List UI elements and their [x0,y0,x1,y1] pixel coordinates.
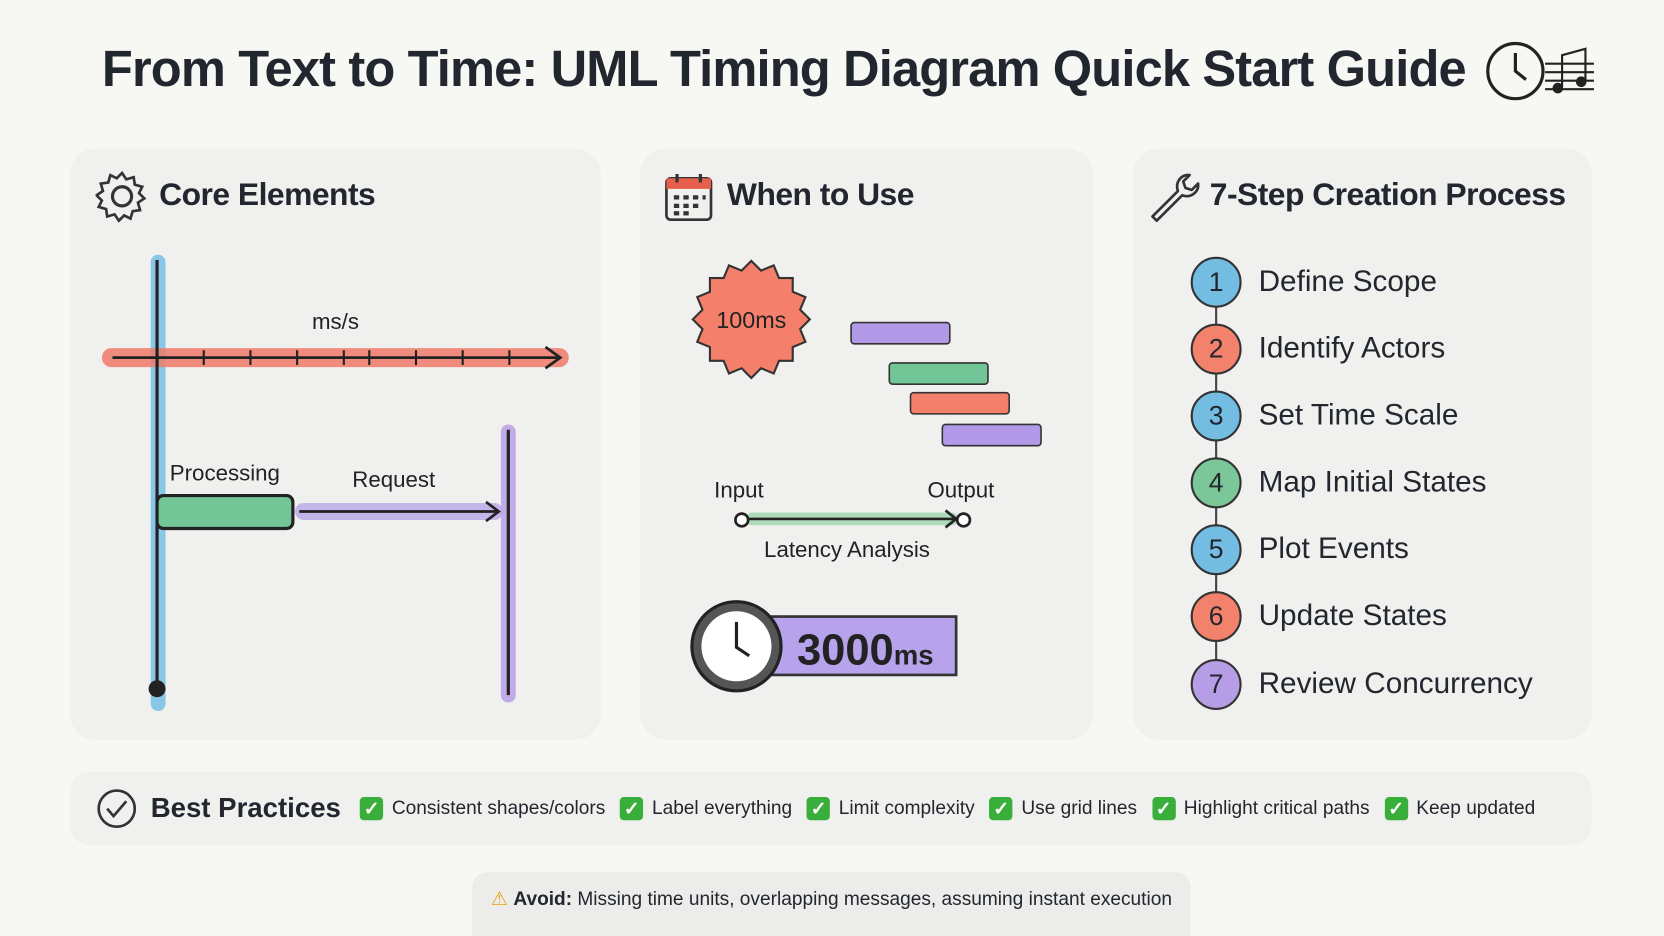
practices list: ✓ [1388,797,1404,819]
step 6: 6 [1209,602,1224,631]
icon: check circle [97,789,136,828]
panel: 7-step process [1133,149,1592,740]
diagram: timing axes: Processing [170,461,280,486]
timeline connector [1215,281,1217,684]
title: From Text to Time: UML Timing Diagram Quick Start Guide [102,41,1466,98]
icon: clock and music [1486,42,1594,100]
heading: core elements: Core Elements [159,177,375,212]
practices list: Highlight critical paths [1184,797,1370,818]
practices list: Use grid lines [1021,797,1137,818]
step 2: 2 [1209,334,1224,364]
step 1: Define Scope [1259,264,1437,297]
practices list: ✓ [364,797,380,819]
step 3: 3 [1209,401,1224,431]
panel: best practices [70,771,1592,845]
diagram: timing axes [102,254,569,711]
practices list: Consistent shapes/colors [392,797,605,818]
step 7 [1190,659,1533,710]
diagram: timing axes: Request [352,467,436,492]
step 6 [1190,591,1447,642]
icon: gear [96,170,146,223]
practices list: ✓ [624,797,640,819]
heading: best practices: Best Practices [151,792,341,823]
step 5: Plot Events [1259,532,1409,565]
practices list: Limit complexity [839,797,975,818]
diagram: timing axes: ms/s [312,309,359,334]
step 6: Update States [1259,599,1447,631]
callout: avoid [472,872,1191,936]
practices list [360,797,1535,820]
practices list: Keep updated [1416,797,1535,818]
step 1 [1190,256,1437,308]
step 2: Identify Actors [1259,331,1445,364]
practices list: ✓ [993,797,1009,819]
step 3: Set Time Scale [1259,398,1458,431]
practices list: ✓ [811,797,827,819]
step 4: Map Initial States [1259,465,1487,498]
step 5: 5 [1209,535,1224,565]
panel: when to use [640,149,1093,740]
step 3 [1190,390,1458,442]
step 7: 7 [1209,670,1224,699]
diagram: latency: Latency Analysis [764,537,930,562]
practices list: Label everything [652,797,792,818]
callout: avoid: ⚠ Avoid: Missing time units, overlapping messages, assuming instant execution [491,888,1172,909]
diagram: latency [690,259,1042,692]
heading: when to use: When to Use [727,177,914,212]
panel: core elements [70,149,601,740]
icon: calendar [665,174,712,221]
step 7: Review Concurrency [1259,666,1533,699]
step 4: 4 [1209,468,1224,498]
step 1: 1 [1209,267,1224,297]
practices list: ✓ [1156,797,1172,819]
diagram: latency: Output [927,478,995,503]
icon: wrench [1151,174,1200,222]
heading: 7-step creation process: 7-Step Creation Process [1210,177,1566,212]
diagram: latency: 3000ms [797,626,934,674]
diagram: latency: Input [714,478,765,503]
step 5 [1190,524,1409,576]
step 2 [1190,324,1445,375]
diagram: latency: 100ms [716,307,786,333]
step 4 [1190,457,1487,508]
